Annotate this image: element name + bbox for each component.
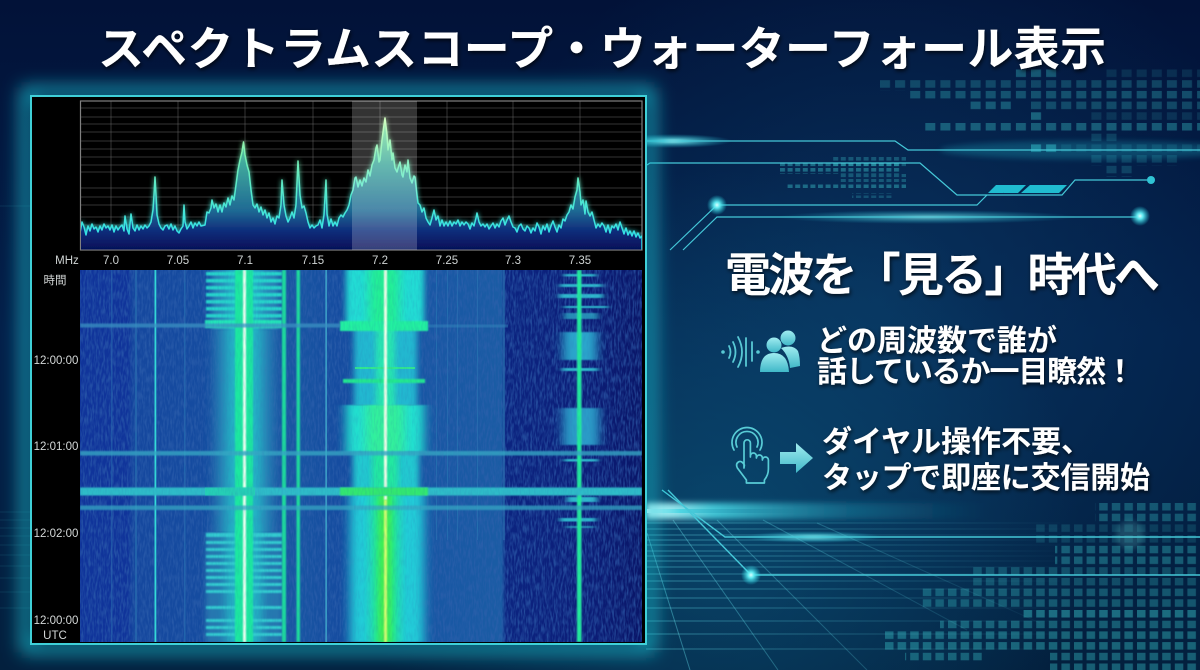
frequency axis labels: 7.2 (372, 255, 388, 267)
text: no dial operation, tap to start transmitting: ダイヤル操作不要、 (822, 425, 1091, 459)
frequency axis labels: 7.05 (167, 255, 189, 267)
decorative pixel squares: top right (880, 69, 1200, 177)
frequency axis labels (55, 255, 591, 267)
heading: era of seeing radio waves: 電波を「見る」時代へ (725, 249, 1160, 301)
frequency axis labels: 7.1 (237, 255, 253, 267)
frequency axis labels: 7.15 (302, 255, 324, 267)
text: see who is talking on which frequency: 話しているか一目瞭然！ (817, 356, 1135, 389)
icon: sound waves and people (721, 330, 800, 372)
text: see who is talking on which frequency: どの周波数で誰が (817, 324, 1057, 358)
frequency axis labels: 7.35 (569, 255, 591, 267)
frequency axis labels: 7.0 (103, 255, 119, 267)
spectrum chart (80, 101, 642, 251)
frequency axis labels: 7.25 (436, 255, 458, 267)
perspective grid (646, 520, 1060, 670)
decorative pixel squares: middle (780, 157, 906, 198)
signal near 7.1 MHz (205, 270, 282, 642)
frequency axis labels: MHz (55, 255, 79, 267)
time axis labels: 時間 (44, 274, 66, 287)
text: see who is talking on which frequency (817, 324, 1135, 389)
signal near 7.2 MHz (340, 270, 428, 642)
text: no dial operation, tap to start transmitting: タップで即座に交信開始 (822, 462, 1150, 495)
narrow carriers (154, 270, 327, 642)
faint vertical carriers (111, 270, 505, 642)
icon: tapping hand (732, 428, 768, 483)
panel: spectrum scope and waterfall display (26, 92, 650, 648)
horizontal interference bands (80, 324, 642, 510)
time axis labels: 12:02:00 (34, 528, 78, 540)
time axis labels: 12:00:00 (34, 355, 78, 367)
arrow (780, 443, 813, 473)
time axis labels (34, 274, 78, 642)
time axis labels: 12:00:00 (34, 615, 78, 627)
signal near 7.35 MHz (559, 270, 608, 642)
circuit lines and light streaks (612, 134, 1200, 585)
frequency axis labels: 7.3 (505, 255, 521, 267)
decorative pixel squares: bottom right (885, 503, 1200, 670)
time axis labels: 12:01:00 (34, 441, 78, 453)
waterfall chart (80, 270, 642, 642)
text: no dial operation, tap to start transmitting (822, 425, 1150, 495)
title: スペクトラムスコープ・ウォーターフォール表示 (98, 23, 1106, 75)
time axis labels: UTC (43, 630, 67, 642)
